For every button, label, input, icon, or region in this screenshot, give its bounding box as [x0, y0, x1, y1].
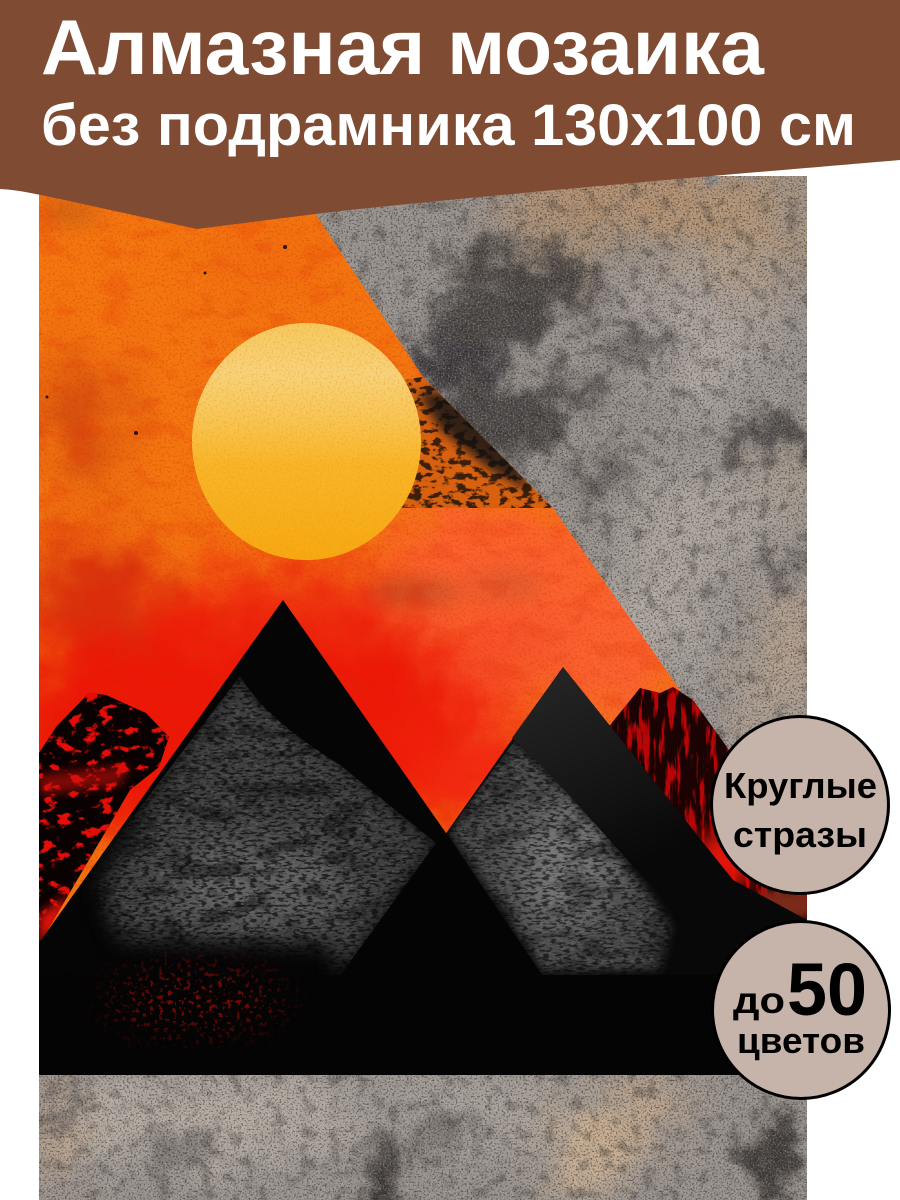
badge: round rhinestones: Круглые — [724, 765, 877, 806]
badge: round rhinestones: стразы — [733, 814, 867, 855]
front black pyramid — [340, 878, 542, 975]
dark scorched band beside the sun — [400, 376, 556, 510]
gray face of large pyramid — [93, 676, 436, 972]
title — [41, 3, 856, 158]
distant red hill left — [39, 690, 174, 945]
title line 2: без подрамника 130х100 см — [41, 93, 856, 158]
badge: up to 50 colours: цветов — [737, 1020, 865, 1061]
badge: up to 50 colours: 50 — [787, 948, 867, 1031]
large black pyramid — [39, 600, 446, 975]
small black pyramid — [446, 667, 807, 975]
badge: round rhinestones — [712, 716, 888, 894]
scattered dark dots on the sky — [46, 245, 287, 435]
icon: sun — [190, 320, 424, 564]
title line 1: Алмазная мозаика — [41, 3, 765, 91]
header banner — [0, 0, 900, 229]
gray face of small pyramid — [448, 741, 675, 975]
artwork: mountain painting — [0, 165, 819, 1200]
panel: gray concrete background — [30, 165, 817, 1200]
red flecks at the foot of the large pyramid — [87, 952, 305, 1048]
distant red hill right — [610, 687, 807, 920]
upper shaded flank of small pyramid — [512, 667, 690, 826]
panel: orange-red sky — [39, 194, 682, 934]
black ground strip — [544, 975, 658, 976]
badge: up to 50 colours: до — [733, 980, 785, 1021]
badge: up to 50 colours — [712, 922, 890, 1098]
